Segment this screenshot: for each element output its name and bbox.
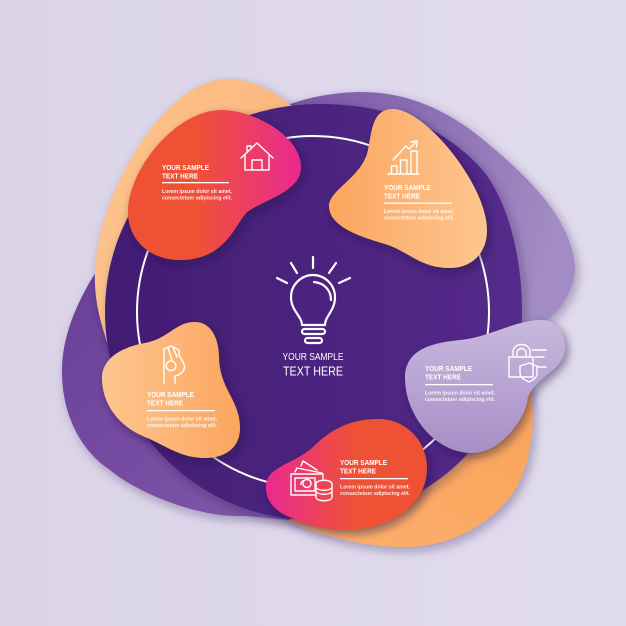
security text [425,366,496,403]
security text: Lorem ipsum dolor sit amet, [425,390,496,396]
home text: consectetuer adipiscing elit. [162,196,233,202]
panel: ok hand [102,322,240,458]
home text [162,165,233,202]
back blob: lilac [285,92,575,350]
growth text: TEXT HERE [384,194,420,200]
security text: TEXT HERE [425,374,461,382]
icon: lightbulb [277,257,350,343]
money text: YOUR SAMPLE [340,460,387,467]
panel: money [266,419,427,530]
central heading: TEXT HERE [283,364,343,378]
money text: consectetuer adipiscing elit. [340,491,411,497]
home text: YOUR SAMPLE [162,165,209,172]
back blob: orange [288,385,533,547]
central heading: YOUR SAMPLE [282,351,344,363]
money text: Lorem ipsum dolor sit amet, [340,484,411,490]
back blob: peach [95,79,292,345]
home text: Lorem ipsum dolor sit amet, [162,189,233,195]
security text: YOUR SAMPLE [425,366,472,373]
money text: TEXT HERE [340,468,376,476]
icon: ok hand [164,346,185,383]
icon: bar chart with arrow [388,141,419,174]
ok hand text: YOUR SAMPLE [147,392,194,399]
centre: lightbulb with title [277,257,350,378]
back blob: purple [62,272,320,520]
panel: growth [329,109,487,268]
ok hand text: TEXT HERE [147,400,183,408]
growth text: Lorem ipsum dolor sit amet, [384,209,455,215]
icon: banknotes and coins [291,461,332,501]
security text: consectetuer adipiscing elit. [425,397,496,403]
white ring [137,136,489,488]
panel: home [128,110,301,260]
home text: TEXT HERE [162,174,198,180]
ok hand text [147,392,218,429]
growth text [384,185,455,222]
dark central disc [105,104,522,520]
ok hand text: Lorem ipsum dolor sit amet, [147,416,218,422]
growth text: consectetuer adipiscing elit. [384,216,455,222]
icon: house [241,143,273,170]
panel: security [405,320,565,453]
ok hand text: consectetuer adipiscing elit. [147,423,218,429]
money text [340,460,411,497]
growth text: YOUR SAMPLE [384,185,431,192]
central heading [282,351,344,378]
icon: padlock and shield [509,344,546,382]
